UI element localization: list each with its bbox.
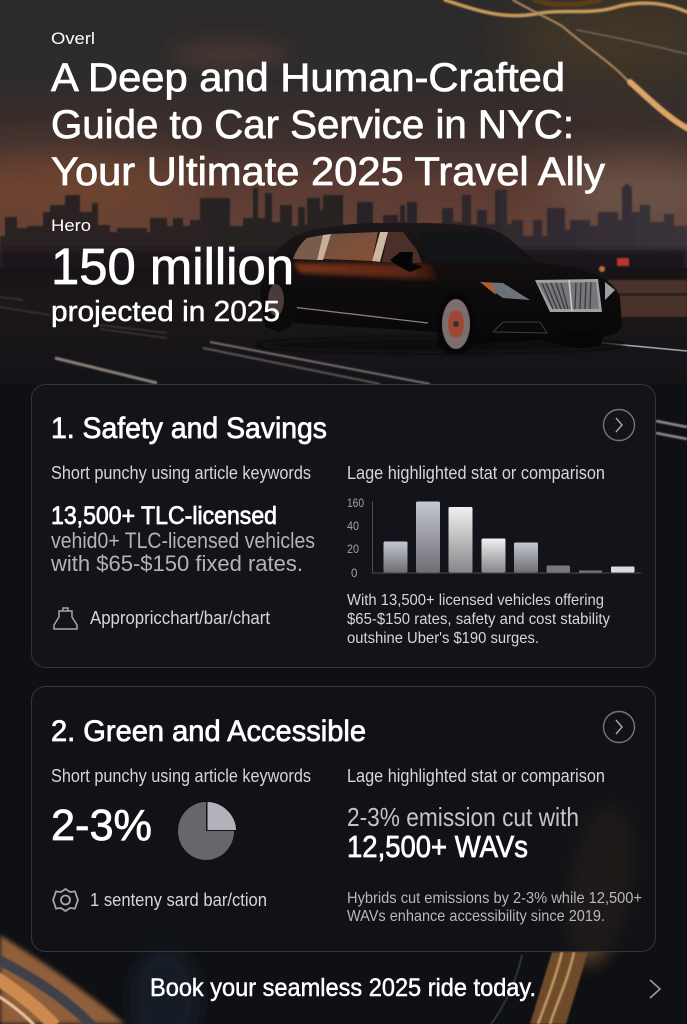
stat: 12,500+ WAVs: 12,500+ WAVs	[347, 829, 528, 864]
background: road	[0, 250, 687, 385]
lower page dark background	[0, 385, 687, 1024]
hero label: Hero	[51, 216, 91, 235]
chart commentary: outshine Uber's $190 surges.	[347, 630, 539, 647]
commentary: WAVs enhance accessibility since 2019.	[347, 908, 605, 925]
eyebrow: Overl: Overl	[51, 29, 95, 48]
stat: 2-3%: 2-3%	[51, 801, 152, 850]
lower air intake	[493, 322, 547, 333]
bar chart: 160	[347, 498, 364, 510]
background: dusk sky	[0, 0, 687, 270]
stat: emission cut: 2-3% emission cut with	[347, 802, 579, 832]
panel 1 heading: 1. Safety and Savings	[51, 412, 327, 445]
background: traffic lights and barrier	[599, 258, 687, 317]
stat description	[50, 528, 315, 576]
icon: circled chevron	[604, 712, 634, 742]
title: A Deep and Human-Crafted	[51, 56, 565, 100]
rear wheel	[265, 283, 297, 331]
stat description: with $65-$150 fixed rates.	[50, 551, 303, 576]
headlight	[480, 282, 530, 300]
title: Guide to Car Service in NYC:	[51, 103, 574, 147]
pie chart	[178, 802, 236, 860]
car side mirror	[390, 252, 423, 272]
car windshield	[420, 233, 533, 262]
chart commentary: $65-$150 rates, safety and cost stability	[347, 611, 610, 628]
car trim line	[292, 307, 428, 323]
icon: bell	[54, 608, 77, 629]
stat: 13,500+ TLC-licensed: 13,500+ TLC-licensed	[51, 502, 277, 530]
left subhead: Short punchy using article keywords	[51, 766, 311, 786]
background: copper light swirl bottom left	[0, 935, 125, 1024]
commentary: Hybrids cut emissions by 2-3% while 12,500+	[347, 890, 642, 907]
bar chart: 0	[351, 568, 357, 580]
background: golden light swirls top right	[445, 0, 687, 130]
panel: Green and Accessible	[32, 686, 656, 952]
background: city skyline	[0, 183, 687, 270]
right headlight	[605, 282, 615, 300]
right subhead: Lage highlighted stat or comparison	[347, 766, 605, 786]
hero stat: 150 million: 150 million	[51, 238, 294, 295]
bar chart	[347, 498, 641, 580]
hero caption: projected in 2025	[51, 296, 280, 328]
front wheel	[437, 291, 475, 355]
title	[51, 56, 605, 194]
right subhead: Lage highlighted stat or comparison	[347, 463, 605, 483]
background: copper light streak bottom right	[491, 952, 588, 1024]
car side windows	[293, 232, 422, 263]
right wheel	[562, 332, 602, 348]
bar chart: 40	[347, 521, 359, 533]
icon caption: Appropricchart/bar/chart	[90, 608, 270, 628]
stat description: vehid0+ TLC-licensed vehicles	[51, 528, 315, 553]
icon: circled chevron	[604, 410, 634, 440]
chrome grille	[535, 279, 602, 312]
panel 2 heading: 2. Green and Accessible	[51, 715, 366, 748]
car side reflection	[293, 263, 438, 280]
icon: gear	[53, 889, 78, 911]
icon caption: 1 senteny sard bar/ction	[90, 890, 267, 910]
panel: Safety and Savings	[32, 384, 656, 668]
call to action: Book your seamless 2025 ride today.	[150, 974, 536, 1002]
icon: black limousine	[255, 223, 625, 355]
title: Your Ultimate 2025 Travel Ally	[51, 150, 605, 194]
commentary	[347, 890, 642, 925]
bar chart: 20	[347, 544, 359, 556]
arrow: chevron	[650, 980, 660, 998]
chart commentary: With 13,500+ licensed vehicles offering	[347, 592, 604, 609]
chart commentary	[347, 592, 610, 647]
left subhead: Short punchy using article keywords	[51, 463, 311, 483]
